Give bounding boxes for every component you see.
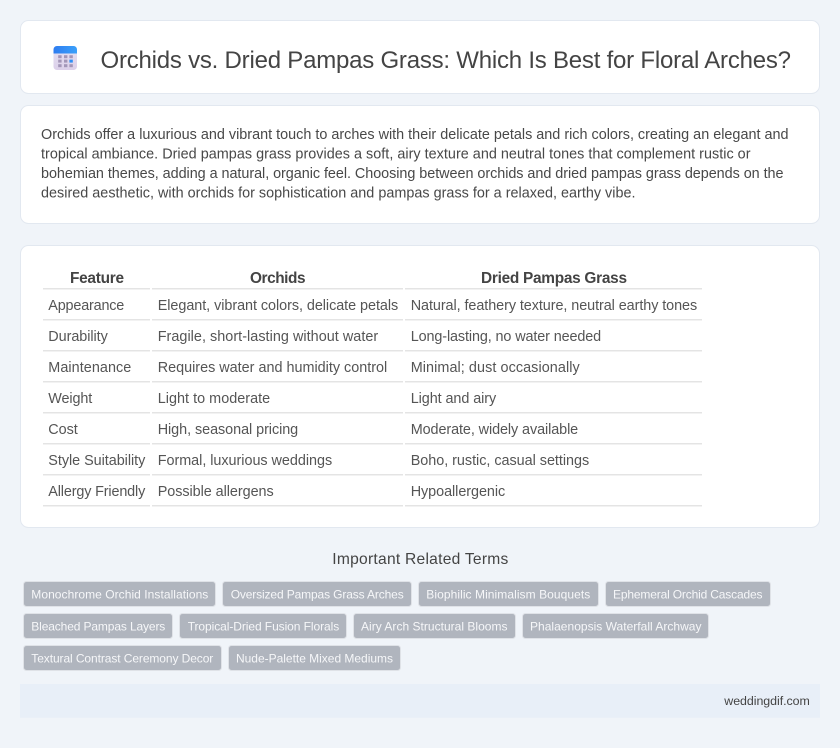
- panel: comparison table: [20, 246, 820, 528]
- tag: Monochrome Orchid Installations: Monochrome Orchid Installations: [31, 587, 208, 601]
- intro paragraph: tropical ambiance. Dried pampas grass provides a soft, airy texture and neutral tones that complement rustic or: [41, 146, 751, 162]
- row: appearance: Elegant, vibrant colors, delicate petals: [158, 298, 398, 314]
- header panel: [20, 20, 820, 94]
- intro paragraph: [41, 127, 788, 202]
- tag: Textural Contrast Ceremony Decor: [24, 646, 222, 670]
- tag: Oversized Pampas Grass Arches: [222, 582, 412, 606]
- row: weight: Light to moderate: [158, 391, 270, 407]
- row: appearance: Appearance: [48, 298, 124, 314]
- row: weight: Weight: [48, 391, 92, 407]
- row: allergy friendly: [43, 484, 702, 506]
- tag: Phalaenopsis Waterfall Archway: [522, 614, 708, 638]
- tag: Nude-Palette Mixed Mediums: [228, 646, 400, 670]
- intro paragraph: desired aesthetic, with orchids for sophistication and pampas grass for a relaxed, earthy vibe.: [41, 186, 636, 202]
- row: maintenance: Maintenance: [48, 360, 131, 376]
- title: Orchids vs. Dried Pampas Grass: Which Is Best for Floral Arches?: [100, 47, 791, 74]
- row: maintenance: Minimal; dust occasionally: [411, 360, 580, 376]
- tag: Tropical-Dried Fusion Florals: Tropical-Dried Fusion Florals: [188, 619, 339, 633]
- tag: Airy Arch Structural Blooms: [354, 614, 516, 638]
- row: weight: Light and airy: [411, 391, 497, 407]
- row: durability: Long-lasting, no water needed: [411, 329, 601, 345]
- intro paragraph: Orchids offer a luxurious and vibrant touch to arches with their delicate petals and rich colors, creating an elegant and: [41, 127, 788, 143]
- table header row: Orchids: [250, 270, 306, 287]
- row: allergy friendly: Allergy Friendly: [48, 484, 146, 500]
- row: cost: [43, 422, 702, 444]
- tag: Phalaenopsis Waterfall Archway: Phalaenopsis Waterfall Archway: [530, 619, 702, 633]
- row: style suitability: Boho, rustic, casual settings: [411, 453, 589, 469]
- row: cost: Moderate, widely available: [411, 422, 578, 438]
- table header row: Feature: [70, 270, 124, 287]
- table header row: [43, 270, 702, 289]
- row: maintenance: Requires water and humidity control: [158, 360, 387, 376]
- icon: calendar: [54, 46, 77, 70]
- tag: Bleached Pampas Layers: [24, 614, 172, 638]
- tag: Monochrome Orchid Installations: [24, 582, 216, 606]
- related terms heading: Important Related Terms: [332, 551, 509, 568]
- panel: introduction: [20, 106, 820, 224]
- row: allergy friendly: Possible allergens: [158, 484, 274, 500]
- row: weight: [43, 391, 702, 413]
- row: cost: High, seasonal pricing: [158, 422, 298, 438]
- row: durability: [43, 329, 702, 351]
- row: durability: Fragile, short-lasting without water: [158, 329, 378, 345]
- row: style suitability: Formal, luxurious weddings: [158, 453, 332, 469]
- tag: Ephemeral Orchid Cascades: Ephemeral Orchid Cascades: [613, 587, 762, 601]
- tag: Biophilic Minimalism Bouquets: Biophilic Minimalism Bouquets: [426, 587, 590, 601]
- footer bar: [20, 684, 820, 718]
- row: cost: Cost: [48, 422, 78, 438]
- tag: Tropical-Dried Fusion Florals: [180, 614, 346, 638]
- tag: Oversized Pampas Grass Arches: Oversized Pampas Grass Arches: [231, 587, 404, 601]
- row: allergy friendly: Hypoallergenic: [411, 484, 505, 500]
- tag: Airy Arch Structural Blooms: Airy Arch Structural Blooms: [361, 619, 508, 633]
- related terms tags: [24, 582, 770, 670]
- tag: Ephemeral Orchid Cascades: [606, 582, 770, 606]
- row: durability: Durability: [48, 329, 109, 345]
- row: maintenance: [43, 360, 702, 382]
- tag: Biophilic Minimalism Bouquets: [418, 582, 598, 606]
- tag: Nude-Palette Mixed Mediums: Nude-Palette Mixed Mediums: [236, 651, 393, 665]
- table header row: Dried Pampas Grass: [481, 270, 627, 287]
- intro paragraph: bohemian themes, adding a natural, organic feel. Choosing between orchids and dried pampas grass depends on the: [41, 166, 784, 182]
- row: appearance: [43, 298, 702, 320]
- footer source text: weddingdif.com: [723, 694, 810, 708]
- row: style suitability: [43, 453, 702, 475]
- tag: Bleached Pampas Layers: Bleached Pampas Layers: [31, 619, 165, 633]
- row: style suitability: Style Suitability: [48, 453, 146, 469]
- tag: Textural Contrast Ceremony Decor: Textural Contrast Ceremony Decor: [31, 651, 213, 665]
- row: appearance: Natural, feathery texture, neutral earthy tones: [411, 298, 697, 314]
